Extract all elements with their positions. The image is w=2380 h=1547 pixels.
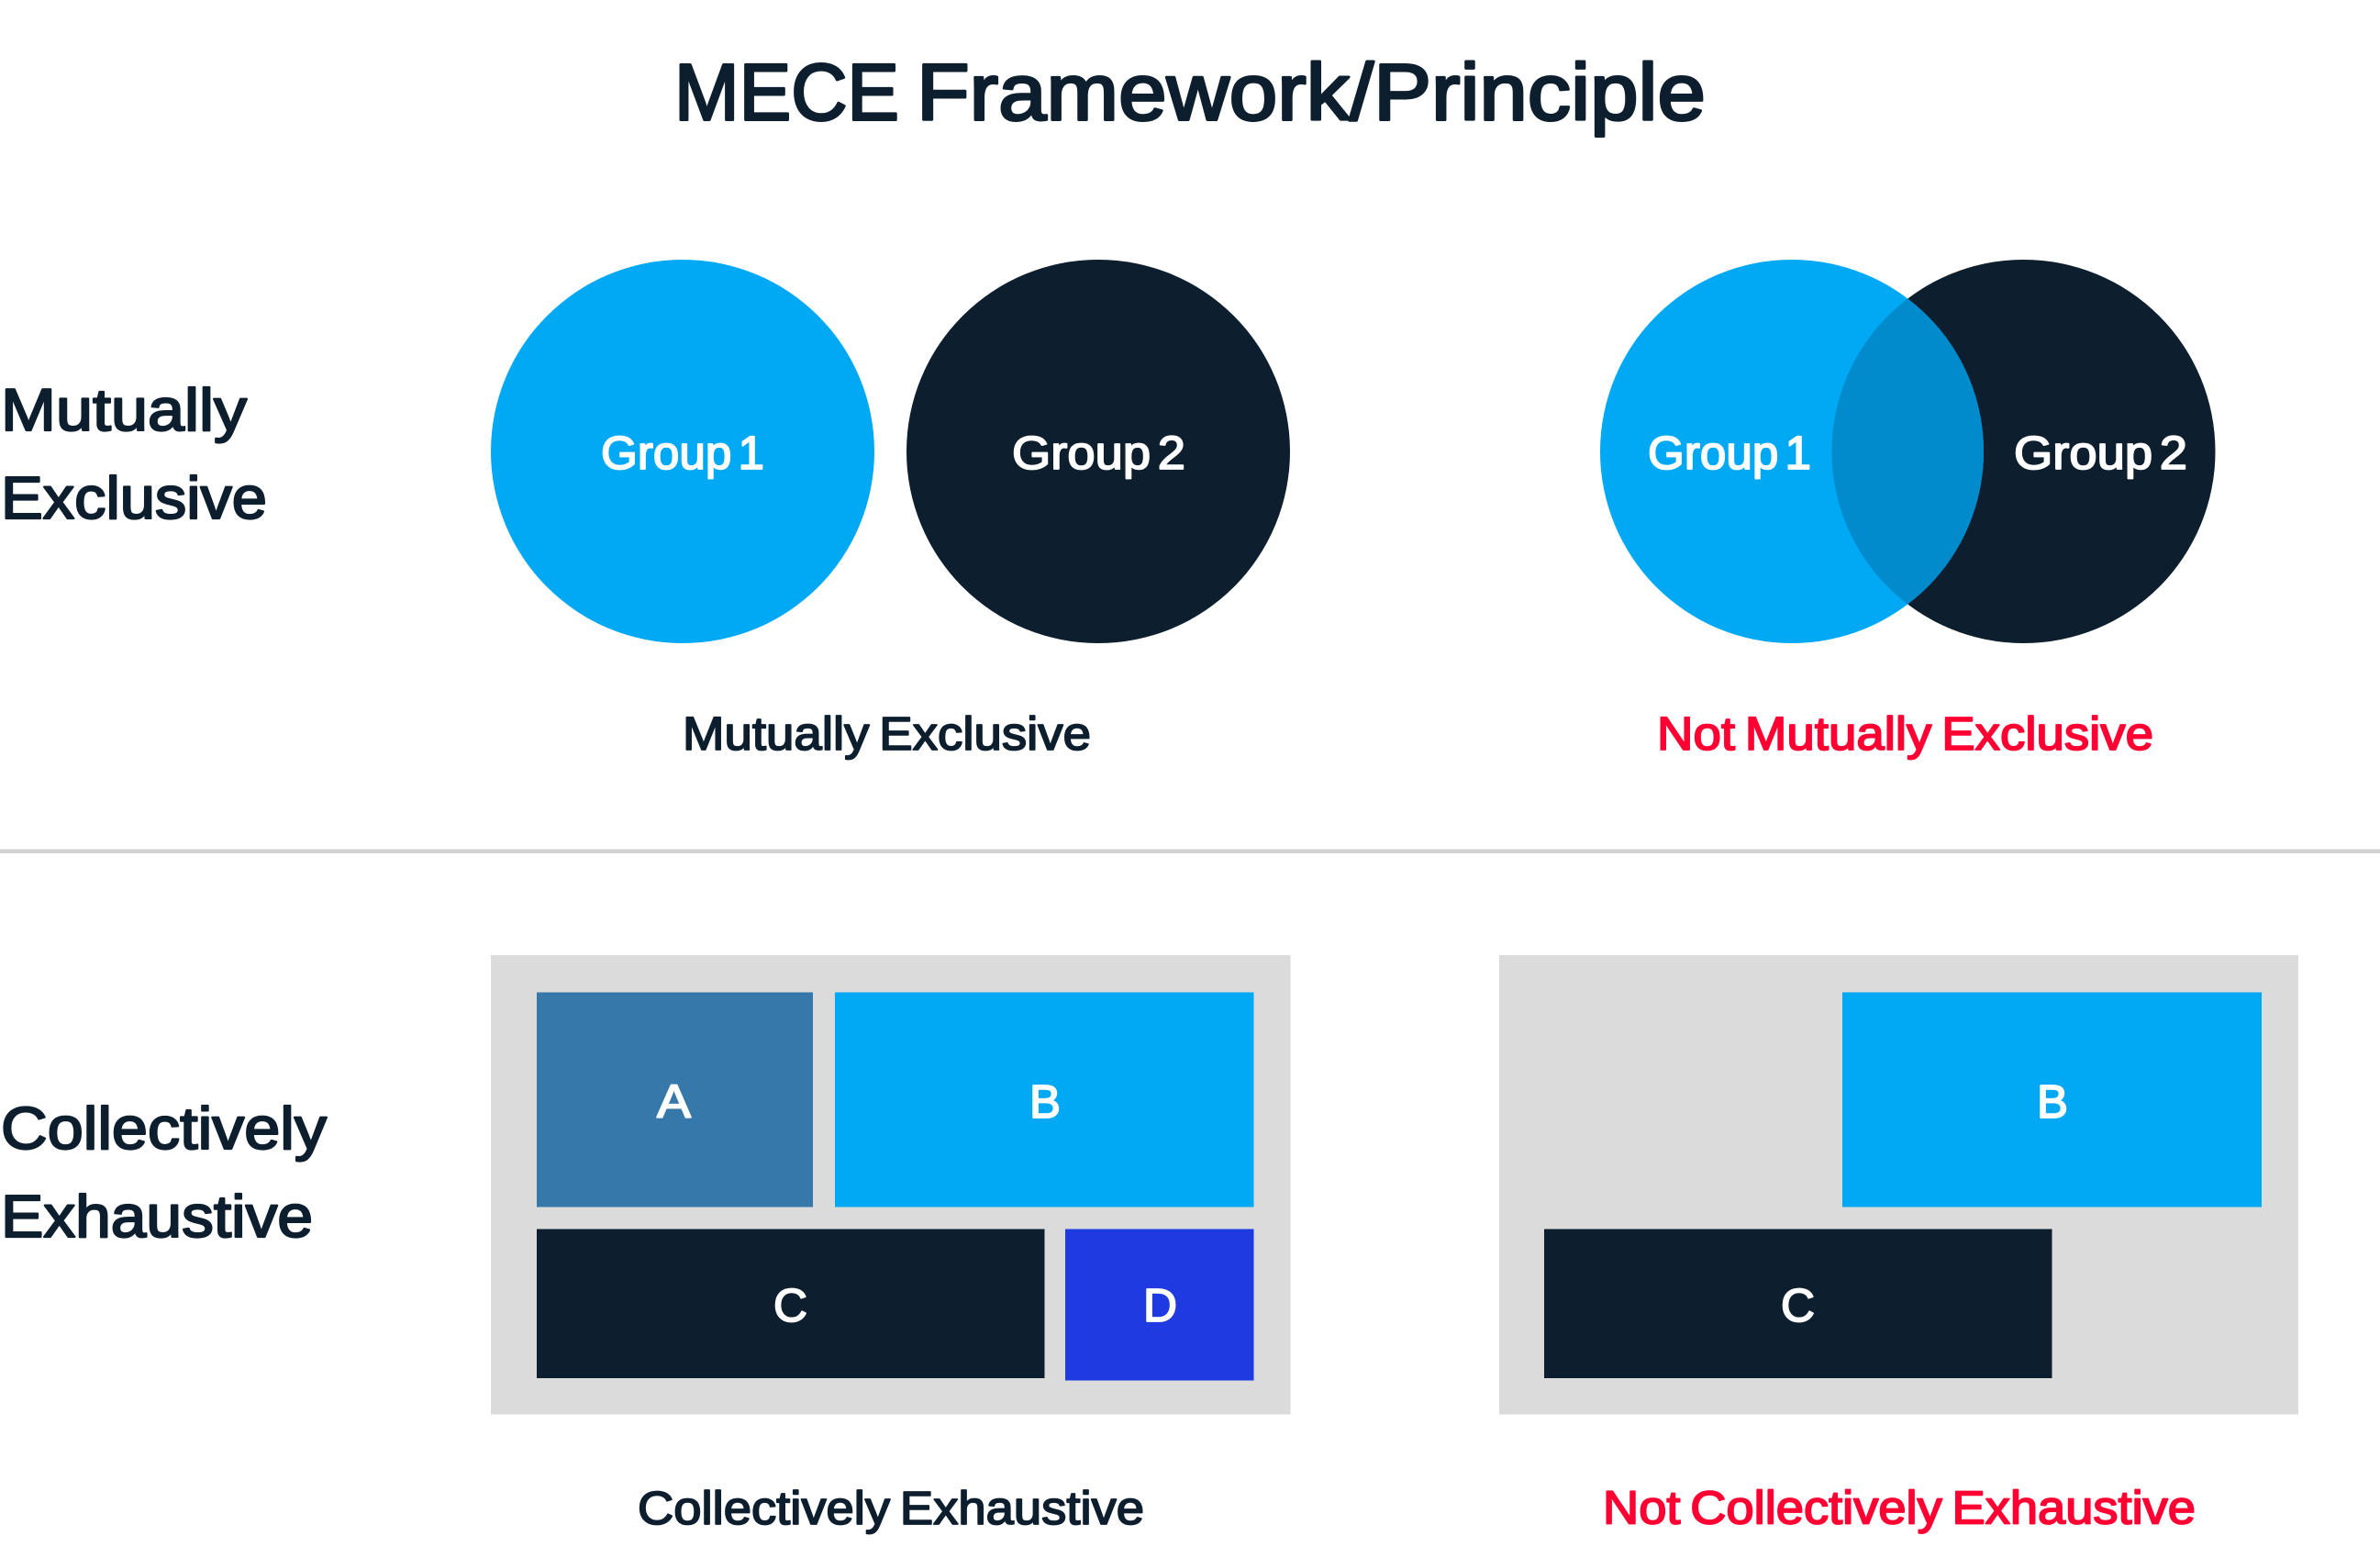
title: MECE [674,48,899,138]
block B: B [2037,1075,2068,1128]
caption: Collectively Exhaustive: Collectively Exhaustive [638,1482,1144,1534]
panel: not collectively exhaustive blocks [1499,955,2298,1415]
row heading: Collectively Exhaustive: Exhaustive [1,1183,313,1250]
block C: C [773,1279,807,1331]
circle: group 1 [491,260,874,643]
block C [1544,1230,2052,1378]
circle: group 2 overlapping [1831,260,2215,643]
circle: group 2 [906,260,1290,643]
circle: group 2: Group 2 [1012,427,1185,479]
row heading: Mutually Exclusive [1,376,267,531]
panel: mutually exclusive circles [491,260,1290,643]
row heading: Mutually Exclusive: Exclusive [1,464,267,531]
overlap region [1831,299,1984,604]
caption: Not Mutually Exclusive: Not Mutually Exclusive [1657,707,2153,760]
block B: B [1029,1075,1061,1128]
block C [537,1230,1044,1378]
title: Framework/Principle [917,48,1706,138]
block D [1065,1230,1253,1380]
caption: Mutually Exclusive: Mutually Exclusive [683,707,1091,760]
circle: group 2 overlapping: Group 2 [2014,427,2187,479]
block B [1842,993,2262,1208]
row heading: Collectively Exhaustive: Collectively [1,1095,328,1162]
row heading: Mutually Exclusive: Mutually [1,376,248,443]
panel: collectively exhaustive blocks [491,955,1290,1415]
circle: group 1: Group 1 [601,427,764,479]
circle: group 1 overlapping: Group 1 [1648,427,1811,479]
divider [0,850,2380,853]
block C: C [1781,1279,1815,1331]
circle: group 1 overlapping [1600,260,1984,643]
row heading: Collectively Exhaustive [1,1095,328,1250]
block A: A [657,1075,691,1128]
block A [537,993,813,1208]
caption: Not Collectively Exhaustive: Not Collectively Exhaustive [1603,1481,2196,1534]
block D: D [1143,1279,1177,1331]
panel: not mutually exclusive overlapping circles [1600,260,2215,643]
block B [835,993,1253,1208]
